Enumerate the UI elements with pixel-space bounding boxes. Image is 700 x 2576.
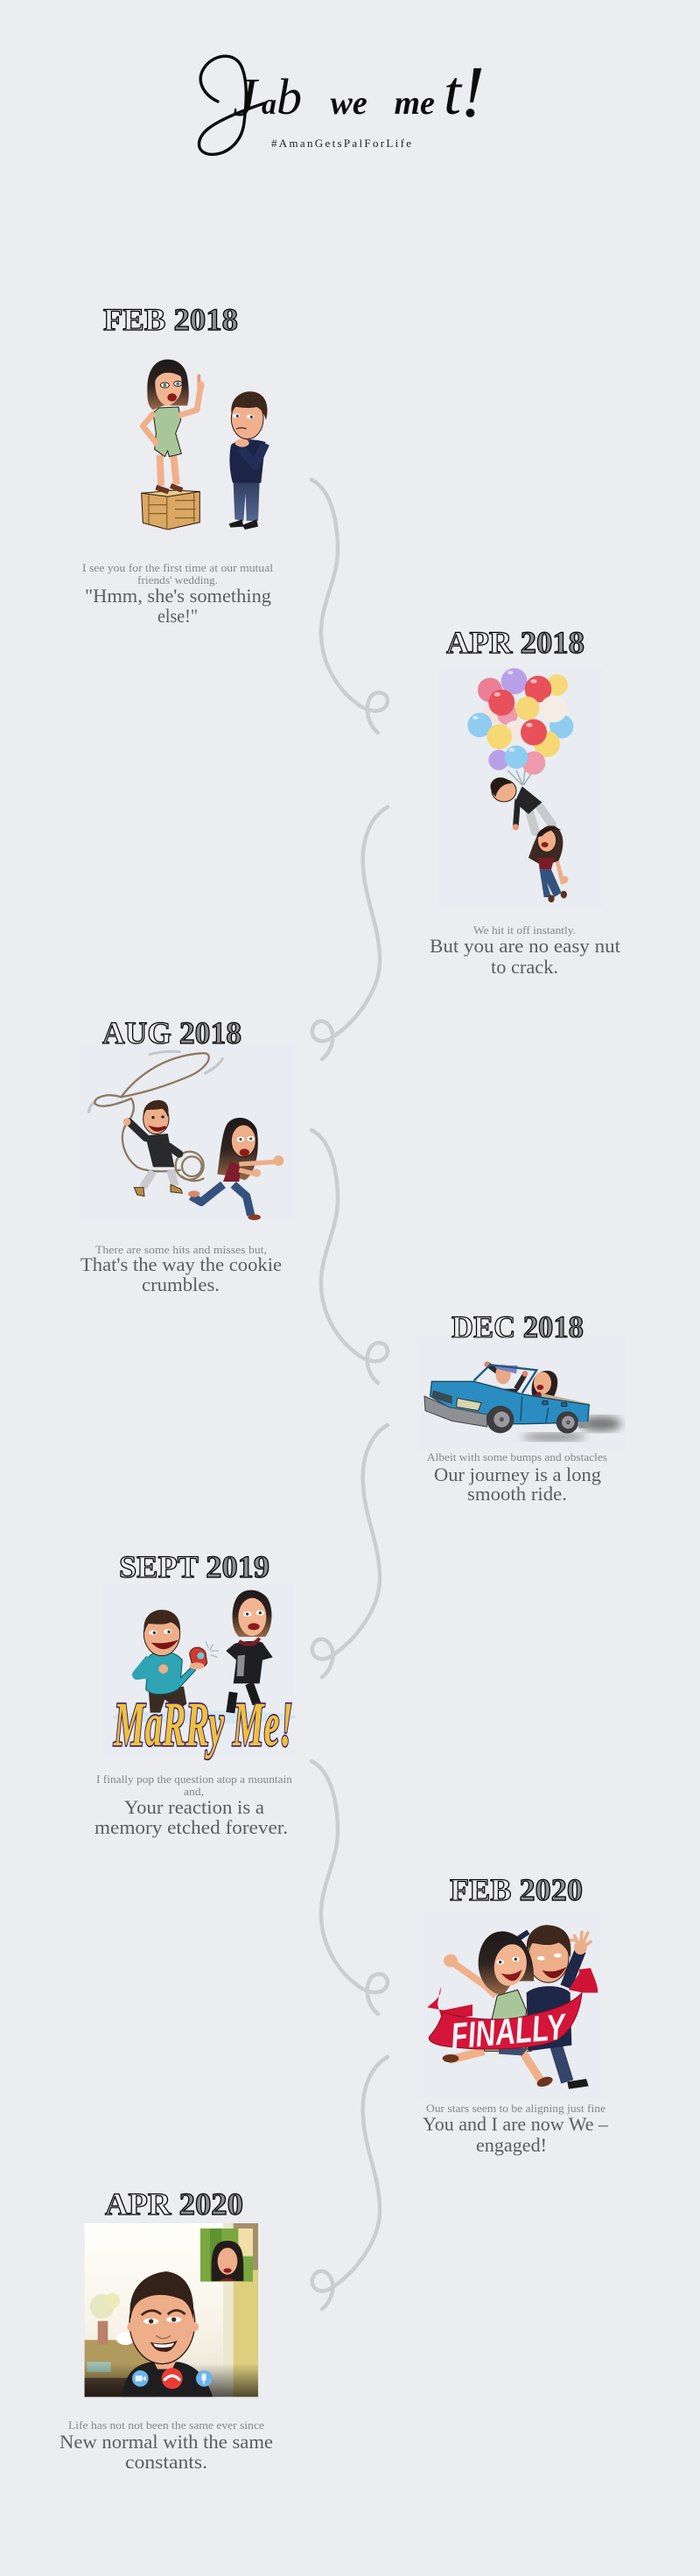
- title: Jab we met: [200, 52, 485, 154]
- connector curve 4: [312, 1425, 388, 1677]
- date heading: DEC 2018: [452, 1309, 584, 1344]
- title: Jab we met: !: [460, 52, 485, 133]
- caption small: friends' wedding.: [137, 574, 218, 586]
- connector curve 5: [312, 1761, 388, 2014]
- title: Jab we met: a: [262, 88, 276, 121]
- illustration: couple in blue convertible: [416, 1337, 626, 1451]
- caption large: You and I are now We –: [423, 2113, 609, 2135]
- panel: Apr 2018: [430, 625, 620, 978]
- caption small: I finally pop the question atop a mountain: [96, 1773, 293, 1786]
- caption large: Our journey is a long: [434, 1463, 601, 1485]
- connector curve 2: [312, 807, 388, 1059]
- panel: Sept 2019: [94, 1549, 296, 1838]
- caption large: [80, 1253, 282, 1295]
- title: Jab we met: we: [322, 85, 368, 122]
- title: Jab we met: me: [386, 85, 435, 122]
- caption small: [82, 562, 274, 586]
- date heading: FEB 2020: [450, 1872, 583, 1907]
- panel: Aug 2018: [80, 1015, 295, 1295]
- illustration: lasso chase: [80, 1044, 295, 1221]
- illustration: woman on crate and man thinking: [142, 360, 268, 530]
- caption small: Albeit with some bumps and obstacles: [427, 1451, 607, 1463]
- caption large: [85, 585, 271, 627]
- caption large: to crack.: [491, 956, 558, 978]
- title: Jab we met: t: [444, 58, 463, 128]
- connector curve 1: [312, 480, 388, 733]
- date heading: FEB 2018: [103, 302, 238, 337]
- caption small: and,: [184, 1786, 204, 1798]
- caption large: crumbles.: [142, 1274, 220, 1295]
- caption small: Life has not not been the same ever since: [68, 2419, 264, 2432]
- connector curve 3: [312, 1130, 388, 1383]
- panel: Feb 2018: [82, 302, 274, 627]
- caption small: Our stars seem to be aligning just fine: [426, 2102, 606, 2115]
- panel: Dec 2018: [416, 1309, 626, 1505]
- title block: [200, 52, 485, 154]
- caption large: memory etched forever.: [94, 1816, 288, 1838]
- caption large: [430, 935, 620, 978]
- caption small: There are some hits and misses but,: [95, 1244, 267, 1256]
- connector curve 6: [312, 2057, 388, 2309]
- illustration: marry me proposal: [102, 1586, 296, 1759]
- date heading: AUG 2018: [102, 1015, 242, 1050]
- caption large: [60, 2431, 273, 2473]
- illustration: balloons lifting the couple: [438, 668, 604, 908]
- panel: Feb 2020: [419, 1872, 609, 2156]
- caption large: [423, 2113, 609, 2156]
- caption large: else!": [158, 605, 198, 627]
- caption large: constants.: [125, 2451, 207, 2473]
- illustration: marry me proposal: MaRRy Me!: [113, 1689, 293, 1759]
- caption small: We hit it off instantly.: [473, 924, 576, 937]
- caption small: [96, 1773, 293, 1798]
- caption small: I see you for the first time at our mutual: [82, 562, 274, 574]
- caption large: [94, 1796, 288, 1838]
- caption large: That's the way the cookie: [80, 1253, 282, 1275]
- caption large: "Hmm, she's something: [85, 585, 271, 607]
- caption large: smooth ride.: [467, 1483, 567, 1505]
- caption large: But you are no easy nut: [430, 935, 620, 957]
- title: Jab we met: b: [276, 68, 302, 125]
- caption large: Your reaction is a: [124, 1796, 264, 1818]
- illustration: video call: [85, 2223, 258, 2397]
- illustration: finally banner: FINALLY: [449, 2005, 569, 2057]
- panel: Apr 2020: [60, 2186, 273, 2473]
- illustration: finally banner: [419, 1913, 605, 2098]
- date heading: APR 2018: [446, 625, 584, 660]
- hashtag subtitle: #AmanGetsPalForLife: [271, 137, 411, 150]
- caption large: New normal with the same: [60, 2431, 273, 2453]
- title: Jab we met: J: [233, 68, 259, 128]
- caption large: engaged!: [476, 2134, 547, 2156]
- caption large: [434, 1463, 601, 1505]
- date heading: SEPT 2019: [119, 1549, 270, 1584]
- date heading: APR 2020: [105, 2186, 243, 2222]
